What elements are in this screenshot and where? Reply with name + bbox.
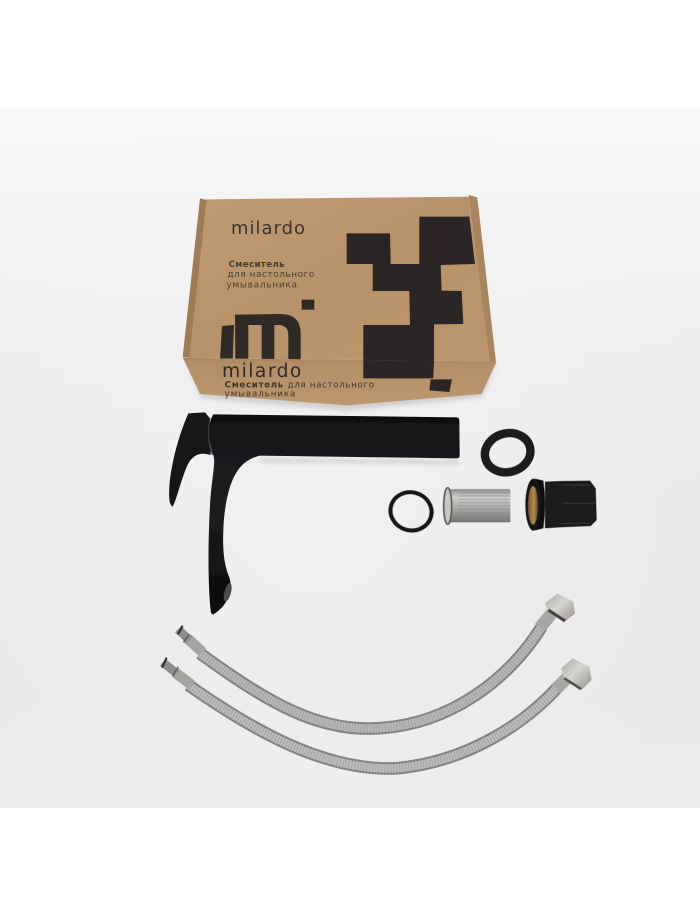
faucet lever handle <box>169 412 211 507</box>
faucet body and spout <box>209 414 460 614</box>
box top face <box>189 197 490 361</box>
lower hose nut end <box>556 658 592 690</box>
photo background <box>0 108 700 808</box>
faucet collar groove <box>208 418 213 455</box>
braided hoses <box>162 593 592 769</box>
top product text: для настольного <box>227 270 314 280</box>
top logo wordmark: milardo <box>231 218 305 239</box>
threaded steel sleeve <box>444 488 510 524</box>
box front flap <box>183 357 496 405</box>
mounting parts <box>386 428 597 535</box>
right side flap <box>469 195 496 363</box>
black retaining nut <box>525 479 597 531</box>
front product text: Смеситель для настольного <box>225 380 374 390</box>
upper hose nut end <box>540 593 575 628</box>
black pixel pattern <box>347 217 475 378</box>
small o-ring <box>386 488 436 535</box>
upper hose threaded end <box>178 626 203 652</box>
front product text: умывальника <box>225 390 295 400</box>
upper braided hose <box>200 627 542 729</box>
large rubber gasket <box>480 428 535 477</box>
front logo wordmark: milardo <box>222 361 301 382</box>
box shadow <box>187 363 497 411</box>
top product text: умывальника <box>226 280 297 290</box>
top product text <box>226 260 314 290</box>
large m logo <box>220 300 314 359</box>
pattern on front flap <box>363 360 452 392</box>
faucet aerator <box>222 582 233 602</box>
top product text: Смеситель <box>229 260 285 270</box>
left side flap <box>183 198 207 358</box>
faucet shadow <box>260 458 459 464</box>
cardboard box <box>183 195 497 411</box>
lower braided hose <box>188 685 558 769</box>
front product text <box>225 380 374 400</box>
lower hose threaded end <box>162 658 192 685</box>
black faucet <box>169 412 460 614</box>
